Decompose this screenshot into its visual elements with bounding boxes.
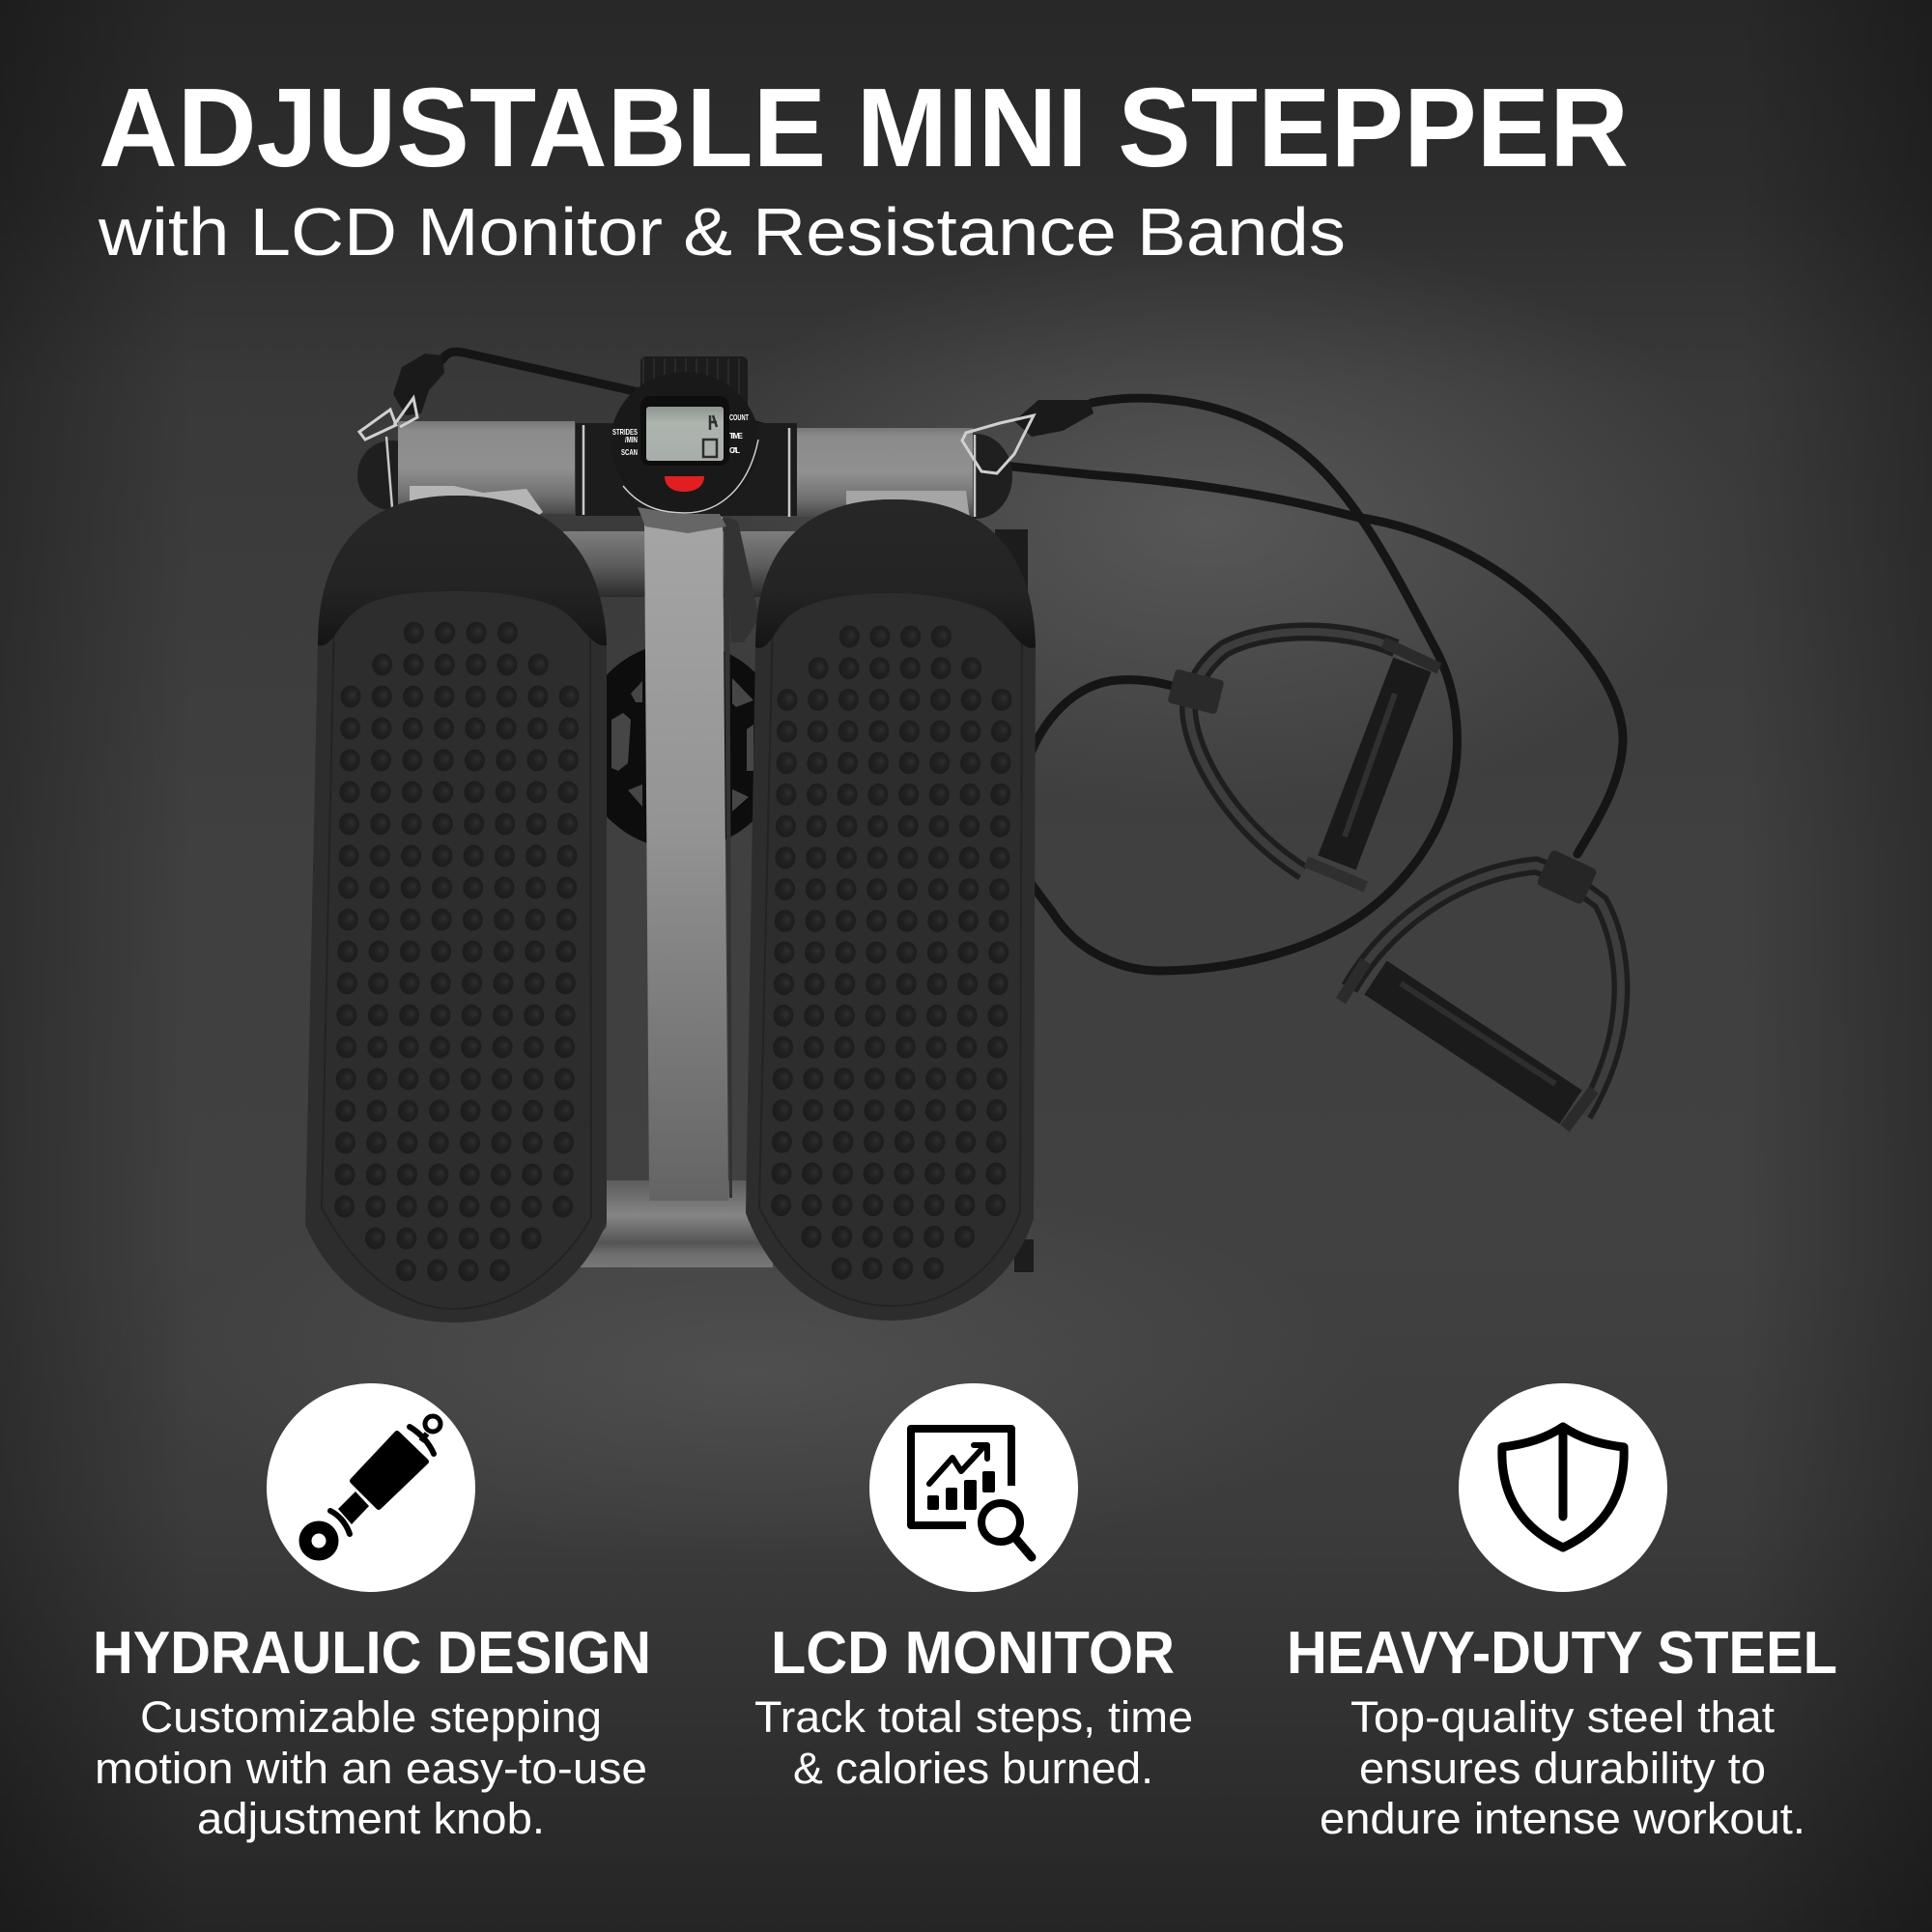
product: resistance bands [442,352,1623,971]
description: Customizable stepping [140,1692,602,1742]
description [754,1692,1193,1793]
lcd digits [703,415,717,457]
red button [665,476,704,492]
rear cross bar [563,531,798,597]
monitor labels [612,413,749,457]
right sleeve [1014,400,1094,437]
monitor labels: STRIDES [612,428,638,437]
housing silver arc [623,440,758,513]
description: & calories burned. [793,1744,1153,1793]
heading: HEAVY-DUTY STEEL [1287,1620,1837,1687]
left sleeve [393,354,444,415]
dots [328,616,587,1287]
heading: HYDRAULIC DESIGN [93,1620,651,1687]
description: ensures durability to [1359,1744,1766,1793]
base cross bar [576,1180,773,1267]
description [95,1692,647,1843]
title: ADJUSTABLE MINI STEPPER [99,65,1629,190]
column collar [638,507,726,533]
handlebar right tube [797,428,973,517]
subtitle: with LCD Monitor & Resistance Bands [98,194,1346,270]
description [1320,1692,1805,1843]
icon: hydraulic cylinder [267,1383,475,1592]
monitor labels: TIME [729,432,744,440]
description: motion with an easy-to-use [95,1744,647,1793]
lcd screen [646,407,724,461]
icon: shield [1459,1383,1667,1592]
column shadow side [726,517,759,642]
description: endure intense workout. [1320,1794,1805,1843]
column edge [724,517,732,1198]
monitor labels: SCAN [621,448,638,457]
monitor labels: COUNT [729,413,749,422]
tube rings [386,425,975,517]
feature: lcd monitor [754,1383,1193,1793]
feature: hydraulic design [93,1383,651,1843]
band two [442,352,1623,854]
flywheel [579,642,785,849]
monitor labels: CAL [729,446,740,455]
handlebar end cap right [939,434,1012,519]
rear dark block [995,529,1028,645]
product: handle two [1341,849,1621,1128]
heel cap [755,499,1036,648]
product: handle one [1167,632,1439,887]
left carabiner [359,398,417,440]
column [644,517,728,1201]
right carabiner [962,415,1034,473]
band one [1024,398,1457,971]
inset outline [322,618,591,1309]
bezel [640,396,729,466]
center black section [576,423,797,516]
monitor labels: /MIN [625,436,638,444]
handlebar end cap left [357,440,425,510]
product: stepper frame [357,354,1094,1272]
description: Track total steps, time [754,1692,1193,1742]
adjustment knob [640,356,748,410]
feature: heavy-duty steel [1287,1383,1837,1843]
handlebar left tube [398,421,575,514]
front dark block [1014,1239,1034,1272]
heading: LCD MONITOR [771,1620,1175,1687]
description: adjustment knob. [197,1794,545,1843]
welds [410,486,543,529]
inset outline [759,618,1022,1306]
dots [765,621,1018,1284]
monitor housing [611,372,759,513]
left pedal [305,496,607,1322]
icon: chart with magnifier [869,1383,1078,1592]
right pedal [746,499,1036,1321]
heel cap [318,496,607,645]
description: Top-quality steel that [1350,1692,1776,1742]
